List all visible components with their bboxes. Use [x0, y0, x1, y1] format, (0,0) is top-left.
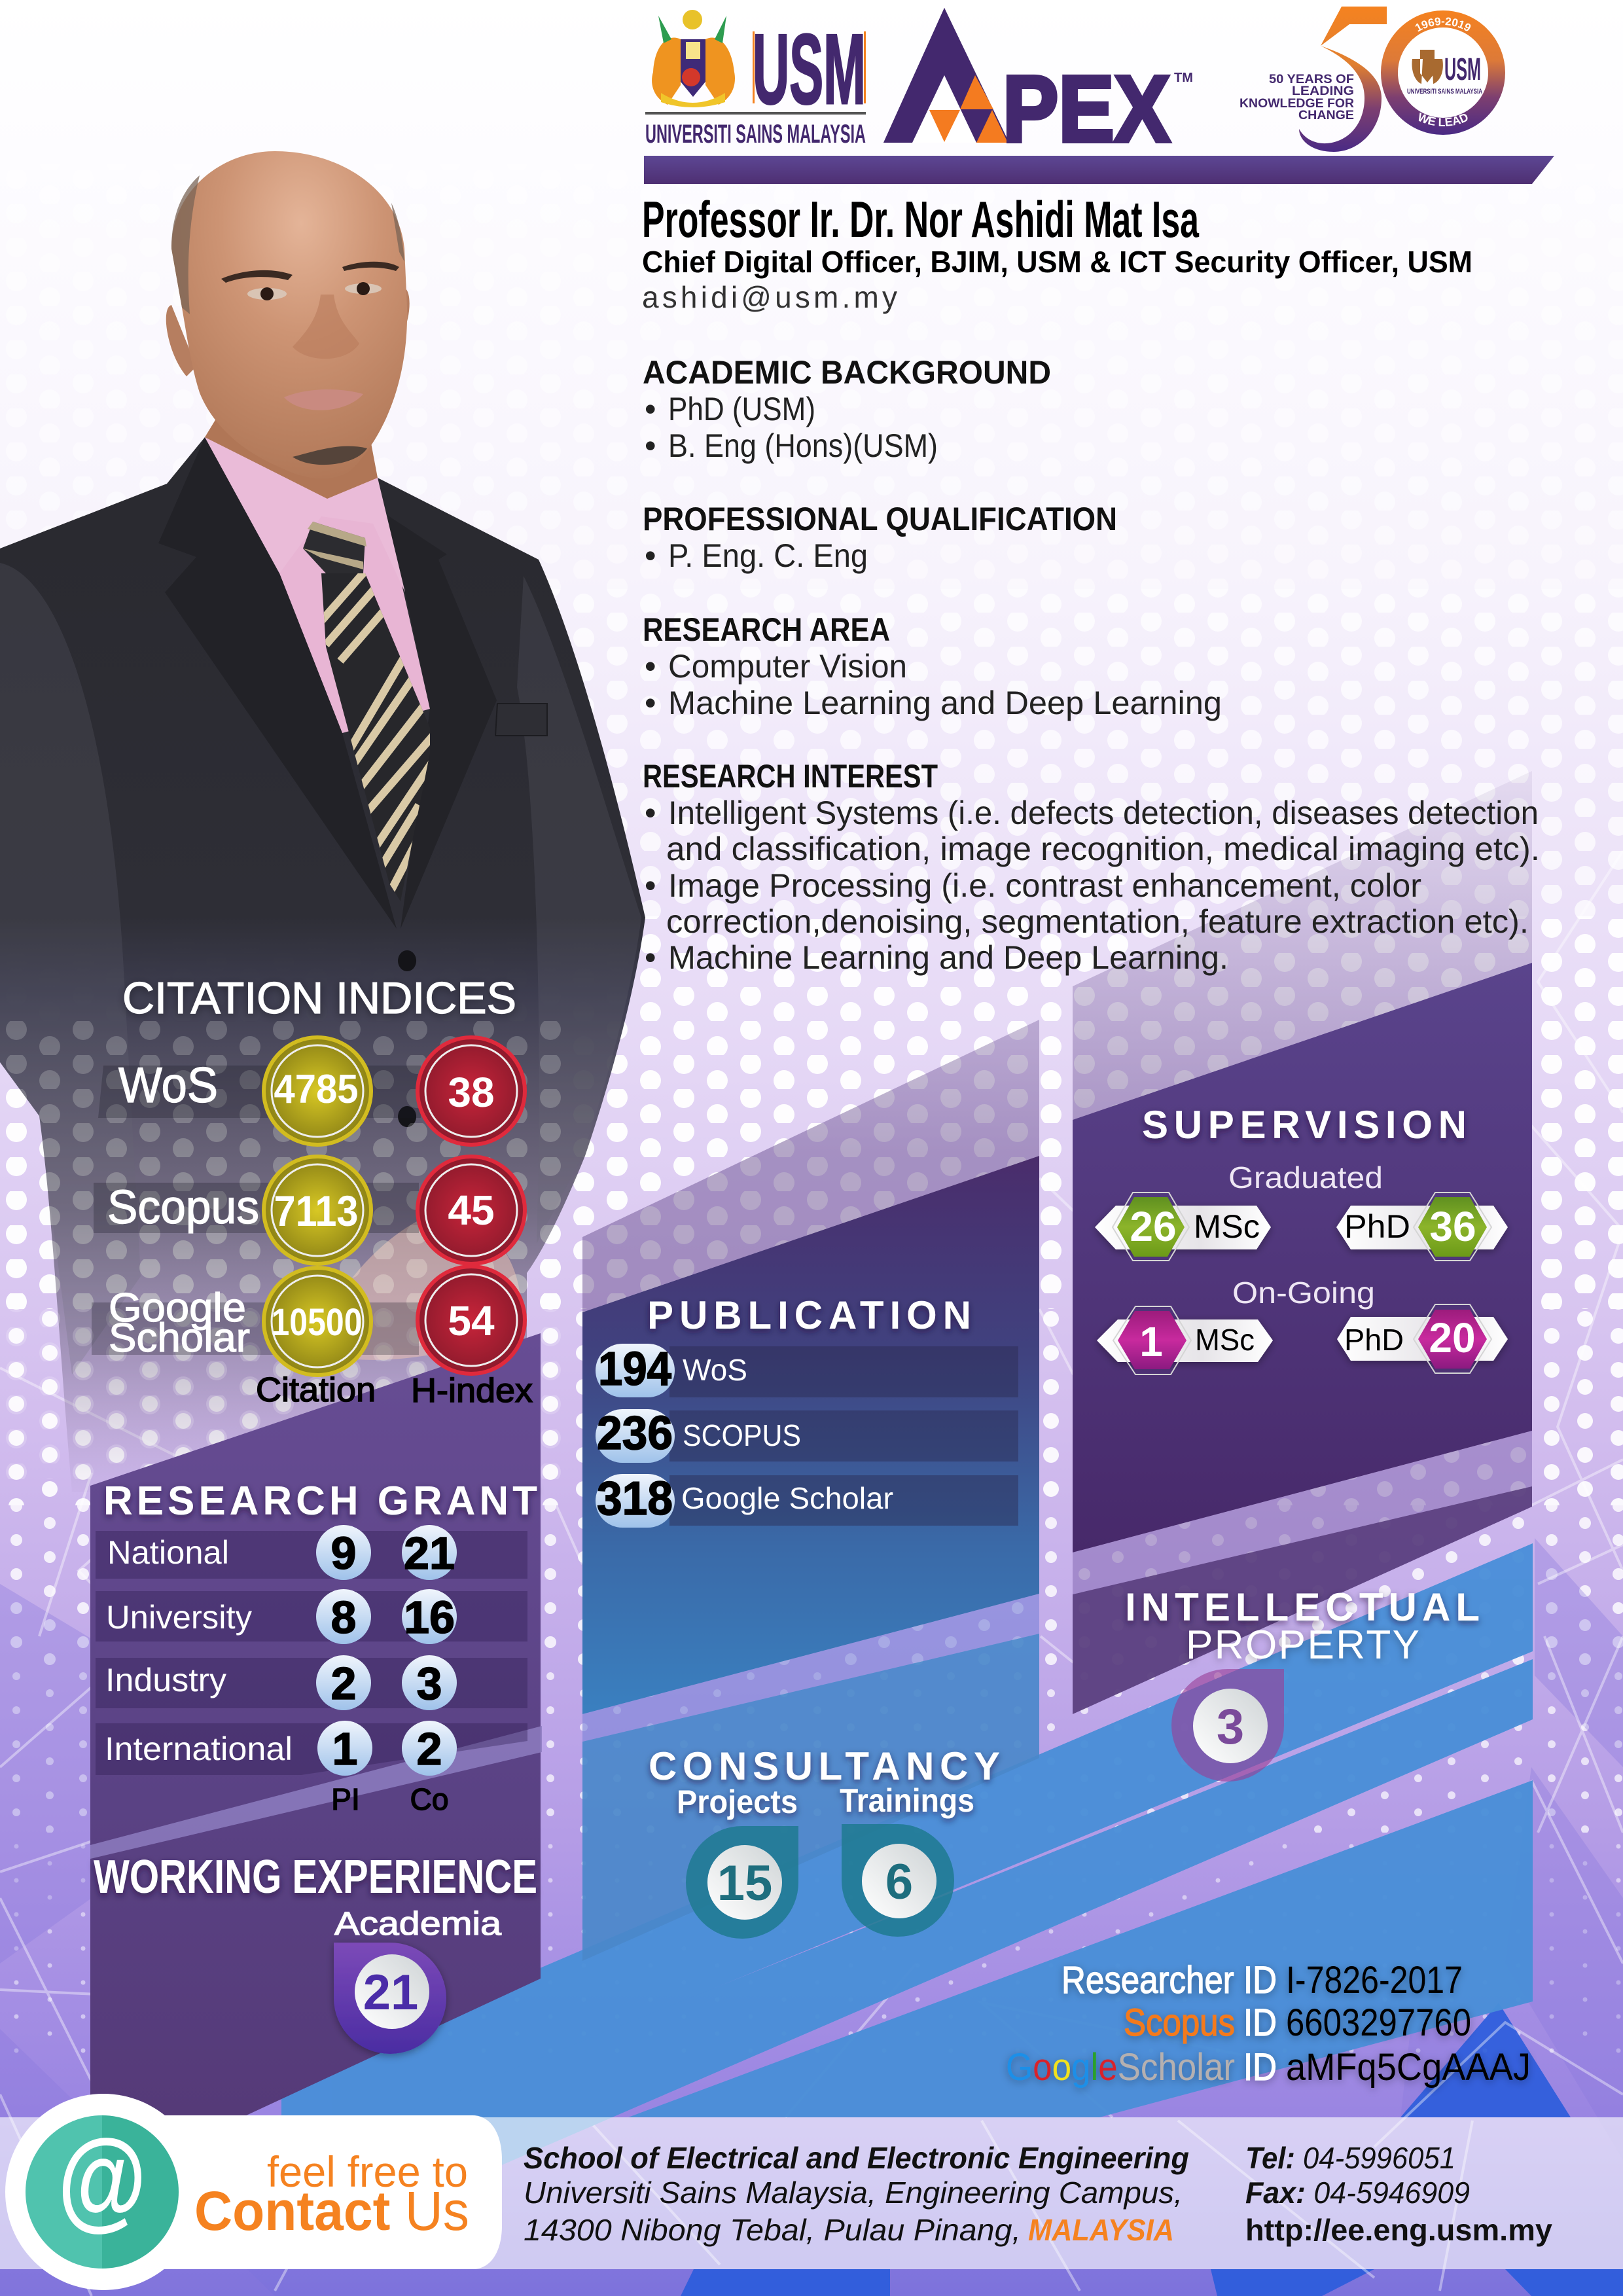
at icon: @: [58, 2117, 147, 2241]
on-going MSc badge: MSc: [1195, 1323, 1255, 1357]
left lapel: [158, 437, 397, 929]
professional qualification: PROFESSIONAL QUALIFICATION: [643, 501, 1117, 537]
profile text: [643, 354, 1540, 976]
grant rows: National: [107, 1534, 229, 1571]
at icon: [26, 2115, 179, 2269]
eyebrows: [221, 262, 399, 283]
scopus id: ID: [1243, 2001, 1277, 2044]
heading: PUBLICATION: [647, 1293, 971, 1337]
address: 14300 Nibong Tebal, Pulau Pinang,: [524, 2213, 1021, 2247]
logo: USM wordmark: UNIVERSITI SAINS MALAYSIA: [645, 120, 866, 149]
address: Universiti Sains Malaysia, Engineering Campus,: [524, 2176, 1183, 2210]
contact us: Contact Us: [194, 2180, 469, 2242]
logo: USM crest: [652, 10, 735, 107]
header bar: [644, 156, 1554, 184]
column captions: H-index: [411, 1372, 533, 1410]
academic background: PhD (USM): [668, 391, 815, 427]
logo: 50 years: 1969-2019: [1415, 17, 1471, 31]
collar: [205, 437, 405, 592]
trainings badge: [842, 1824, 954, 1937]
logo: 50 years: [1240, 7, 1505, 152]
h-index badges: 38: [448, 1069, 495, 1116]
hands: [327, 1210, 520, 1360]
head: [171, 151, 407, 478]
phone, fax and website: Tel: 04-5996051: [1245, 2141, 1455, 2175]
name and title block: ashidi@usm.my: [642, 280, 897, 314]
researcher id: [1061, 1959, 1463, 2001]
contact badge: [5, 2094, 502, 2290]
address: School of Electrical and Electronic Engineering: [524, 2141, 1189, 2175]
panel: consultancy: [649, 1744, 1000, 1939]
logo: 50 years: 50 YEARS OF: [1269, 73, 1354, 86]
heading: WORKING EXPERIENCE: [94, 1851, 537, 1903]
grant rows: [96, 1531, 527, 1775]
grant counts: 1: [332, 1723, 357, 1774]
grant counts: 8: [331, 1592, 356, 1643]
logo: USM wordmark: [645, 14, 866, 149]
panel: left column: [90, 1333, 541, 2117]
graduated label: Graduated: [1228, 1160, 1383, 1194]
logo: 50 years: USM: [1444, 52, 1481, 87]
panel: right column gap strip: [1073, 1431, 1532, 1594]
grant rows: Industry: [105, 1662, 226, 1698]
grant counts: [316, 1525, 457, 1776]
research interest: correction,denoising, segmentation, feature extraction etc).: [666, 903, 1529, 940]
sub labels: Trainings: [840, 1782, 974, 1819]
portrait photo of professor: [0, 151, 645, 1492]
PI and Co captions: PI: [331, 1782, 360, 1816]
graduated MSc badge: MSc: [1194, 1208, 1260, 1245]
row labels: Google: [109, 1285, 246, 1331]
sub labels: [677, 1782, 974, 1820]
blue diagonal bands: [281, 1543, 1533, 2212]
heading: CONSULTANCY: [649, 1744, 1000, 1788]
row bars: [92, 1066, 421, 1355]
research interest: Machine Learning and Deep Learning.: [668, 939, 1228, 976]
graduated MSc badge: [1095, 1193, 1271, 1261]
publication rows: 318: [597, 1473, 673, 1525]
row labels: WoS: [118, 1058, 218, 1113]
sub labels: Projects: [677, 1784, 798, 1820]
logo: 50 years: UNIVERSITI SAINS MALAYSIA: [1407, 88, 1482, 96]
citation badges: 7113: [274, 1187, 359, 1235]
projects badge: 15: [717, 1856, 772, 1911]
heading: SUPERVISION: [1142, 1103, 1467, 1147]
professional qualification: [643, 501, 1117, 574]
research interest: RESEARCH INTEREST: [643, 758, 938, 795]
panel: middle column gap strip: [582, 1594, 1039, 1742]
academia label: Academia: [334, 1905, 501, 1942]
logo: APEX: [883, 8, 1193, 162]
on-going MSc badge: [1097, 1306, 1273, 1374]
grant counts: 3: [417, 1658, 442, 1709]
academic background: [643, 354, 1051, 464]
google scholar id: aMFq5CgAAAJ: [1286, 2046, 1531, 2089]
research interest: •: [645, 939, 656, 976]
eyes: [247, 282, 382, 300]
research area: Computer Vision: [668, 648, 907, 685]
graduated MSc badge: 26: [1130, 1203, 1177, 1250]
phone, fax and website: [1245, 2141, 1552, 2247]
phone, fax and website: Fax: 04-5946909: [1245, 2176, 1470, 2210]
research interest: [643, 758, 1540, 976]
feel free to: feel free to: [267, 2147, 468, 2196]
name and title block: Professor Ir. Dr. Nor Ashidi Mat Isa: [642, 190, 1199, 248]
IP badge: [1171, 1669, 1284, 1782]
research interest: Image Processing (i.e. contrast enhancement, color: [668, 867, 1421, 904]
IP badge: 3: [1217, 1699, 1244, 1755]
research interest: •: [645, 795, 656, 831]
tie: [303, 522, 438, 901]
academic background: •: [645, 391, 656, 427]
heading: CITATION INDICES: [122, 973, 516, 1023]
panel: right column upper: [1073, 963, 1532, 1552]
panel: middle column ghost top: [582, 1020, 1039, 1312]
logo: 50 years: CHANGE: [1298, 109, 1354, 122]
on-going PhD badge: 20: [1429, 1314, 1476, 1361]
panel: right column ghost top: [1073, 771, 1532, 1120]
research area: [643, 611, 1222, 721]
heading line 2: PROPERTY: [1186, 1623, 1419, 1668]
logo: APEX: PEX: [1003, 56, 1170, 162]
right lapel: [378, 478, 497, 929]
scopus id: 6603297760: [1286, 2001, 1471, 2044]
row labels: [107, 1058, 259, 1361]
logo: 50 years: WE LEAD: [1419, 113, 1467, 126]
researcher identifiers: [1006, 1959, 1531, 2089]
graduated PhD badge: [1336, 1193, 1508, 1261]
publication rows: [596, 1343, 1018, 1528]
research interest: •: [645, 867, 656, 904]
research area: RESEARCH AREA: [643, 611, 890, 648]
grant counts: 16: [404, 1592, 455, 1643]
PI and Co captions: Co: [410, 1782, 448, 1816]
address: [524, 2141, 1189, 2247]
PI and Co captions: [331, 1782, 448, 1816]
scopus id: Scopus: [1124, 2001, 1235, 2044]
left column light strip: [90, 1726, 542, 1859]
research area: Machine Learning and Deep Learning: [668, 685, 1222, 721]
suit jacket: [0, 437, 645, 1492]
academic background: •: [645, 427, 656, 464]
logo: 50 years: KNOWLEDGE FOR: [1240, 97, 1354, 111]
grant rows: International: [105, 1731, 293, 1767]
goatee: [293, 446, 367, 465]
name and title block: Chief Digital Officer, BJIM, USM & ICT Security Officer, USM: [642, 245, 1472, 279]
panel: middle column lower: [582, 1634, 1039, 1961]
research area: •: [645, 648, 656, 685]
on-going MSc badge: 1: [1139, 1318, 1163, 1365]
panel: research grant: [96, 1479, 537, 1816]
on-going PhD badge: PhD: [1344, 1323, 1404, 1357]
academia badge: 21: [363, 1965, 418, 2020]
address: MALAYSIA: [1028, 2213, 1174, 2247]
row labels: Scholar: [109, 1316, 250, 1361]
graduated PhD badge: PhD: [1344, 1208, 1410, 1245]
logo: APEX: TM: [1174, 71, 1193, 85]
academic background: B. Eng (Hons)(USM): [668, 427, 938, 464]
pocket: [495, 704, 547, 736]
overlay dots on fading suit: [0, 1021, 563, 1479]
panel: working experience: [94, 1851, 537, 2054]
mouth: [284, 389, 363, 410]
professional qualification: P. Eng. C. Eng: [668, 537, 868, 574]
on-going PhD badge: [1337, 1304, 1508, 1373]
google scholar id: [1006, 2046, 1531, 2089]
publication rows: SCOPUS: [683, 1418, 801, 1452]
panel: citation indices: [92, 973, 533, 1410]
h-index badges: 45: [448, 1187, 495, 1234]
footer contact band: [0, 2117, 1623, 2269]
publication rows: WoS: [683, 1353, 747, 1387]
neck: [205, 419, 378, 499]
research interest: and classification, image recognition, medical imaging etc).: [666, 831, 1540, 867]
hair stubble: [171, 175, 404, 314]
google scholar id: ID: [1243, 2046, 1277, 2089]
scopus id: [1124, 2001, 1471, 2044]
citation badges: 4785: [274, 1067, 359, 1112]
heading line 1: INTELLECTUAL: [1125, 1585, 1480, 1629]
h-index badges: [418, 1037, 525, 1374]
row labels: Scopus: [107, 1181, 259, 1234]
trainings badge: 6: [885, 1854, 913, 1910]
academia badge: [334, 1943, 446, 2054]
name and title block: [642, 190, 1472, 314]
grant counts: 21: [404, 1528, 455, 1579]
research area: •: [645, 685, 656, 721]
nose: [293, 295, 359, 359]
shirt: [205, 437, 430, 733]
grant counts: 2: [417, 1723, 442, 1774]
logo: 50 years: LEADING: [1292, 84, 1354, 98]
academic background: ACADEMIC BACKGROUND: [643, 354, 1051, 391]
panel: right column lower: [1073, 1486, 1532, 1714]
panel: intellectual property: [1125, 1585, 1480, 1782]
publication rows: 194: [598, 1343, 671, 1395]
grant counts: 2: [331, 1658, 356, 1709]
grant rows: University: [106, 1599, 252, 1636]
grant counts: 9: [331, 1528, 356, 1579]
h-index badges: 54: [448, 1297, 495, 1344]
ears: [166, 288, 410, 376]
sleeve highlights: [0, 563, 641, 1374]
researcher id: Researcher ID: [1061, 1959, 1277, 2001]
panel: publication: [596, 1293, 1018, 1528]
publication rows: Google Scholar: [681, 1481, 893, 1515]
graduated PhD badge: 36: [1429, 1203, 1476, 1250]
column captions: [256, 1371, 533, 1410]
citation badges: [264, 1037, 371, 1375]
google scholar id: GoogleScholar: [1006, 2046, 1235, 2089]
logo: USM wordmark: USM: [753, 14, 866, 125]
citation badges: 10500: [271, 1301, 363, 1344]
panel: supervision: [1095, 1103, 1508, 1374]
column captions: Citation: [256, 1371, 376, 1409]
publication rows: 236: [597, 1407, 673, 1460]
professional qualification: •: [645, 537, 656, 574]
projects badge: [686, 1826, 798, 1939]
research interest: Intelligent Systems (i.e. defects detection, diseases detection: [668, 795, 1539, 831]
researcher id: I-7826-2017: [1286, 1959, 1463, 2001]
phone, fax and website: http://ee.eng.usm.my: [1245, 2213, 1552, 2247]
suit buttons: [398, 950, 416, 1127]
on-going label: On-Going: [1232, 1276, 1375, 1310]
heading: RESEARCH GRANT: [103, 1479, 537, 1524]
panel: middle column dark upper: [582, 1156, 1039, 1714]
